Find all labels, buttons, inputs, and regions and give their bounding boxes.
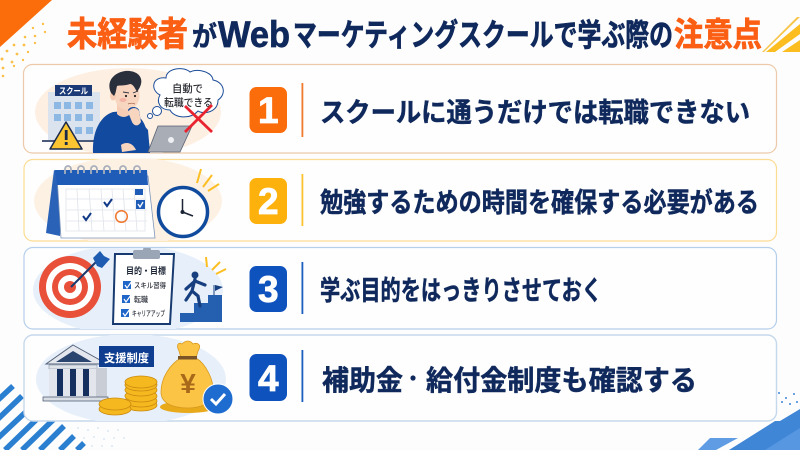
illustration: target, checklist and stairs: 転職 (134, 294, 148, 304)
illustration: bank, coins and money bag: ¥ (180, 368, 196, 399)
title: が (192, 21, 217, 52)
number badge 4 (250, 354, 287, 401)
heading 3: 学ぶ目的をはっきりさせておく (320, 276, 602, 306)
illustration: target, checklist and stairs (33, 245, 226, 335)
title: マーケティングスクールで学ぶ際の (293, 18, 673, 53)
panel 2: secure study time (24, 157, 776, 245)
top-right yellow stripes (762, 17, 800, 52)
number badge 2: 2 (258, 181, 279, 222)
title: 未経験者 (67, 16, 188, 54)
title: Web (218, 14, 290, 55)
number badge 2 (250, 178, 287, 224)
illustration: bank, coins and money bag (36, 334, 233, 424)
thought bubble: 転職できる (164, 96, 213, 109)
illustration: bank, coins and money bag: 支援制度 (104, 351, 149, 365)
heading 1: スクールに通うだけでは転職できない (320, 98, 750, 128)
bottom-left dots (77, 427, 125, 447)
title: 注意点 (674, 16, 762, 53)
number badge 4: 4 (258, 358, 279, 399)
number badge 3: 3 (258, 269, 279, 310)
illustration: calendar and clock (34, 157, 222, 245)
number badge 1 (250, 87, 287, 133)
illustration: target, checklist and stairs: 目的・目標 (126, 265, 166, 276)
thought bubble (148, 69, 223, 132)
illustration: person worried at laptop: スクール (59, 86, 88, 96)
panel 4: check subsidies (24, 334, 776, 424)
bottom-left blue stripes (0, 386, 84, 450)
panel 3: clarify purpose (24, 245, 776, 335)
panel 1: school alone is not enough (24, 64, 776, 156)
number badge 3 (250, 266, 287, 312)
heading 4: 補助金 (322, 365, 403, 396)
title (67, 14, 762, 55)
bottom-right blue shapes (698, 392, 800, 450)
illustration: target, checklist and stairs: スキル習得 (134, 280, 166, 290)
number badge 1: 1 (258, 90, 279, 131)
illustration: target, checklist and stairs: キャリアアップ (132, 309, 165, 318)
heading 4: 給付金制度も確認する (426, 365, 697, 396)
top-left orange corner (0, 0, 52, 77)
thought bubble: 自動で (172, 82, 203, 95)
illustration: person worried at laptop (35, 68, 221, 156)
